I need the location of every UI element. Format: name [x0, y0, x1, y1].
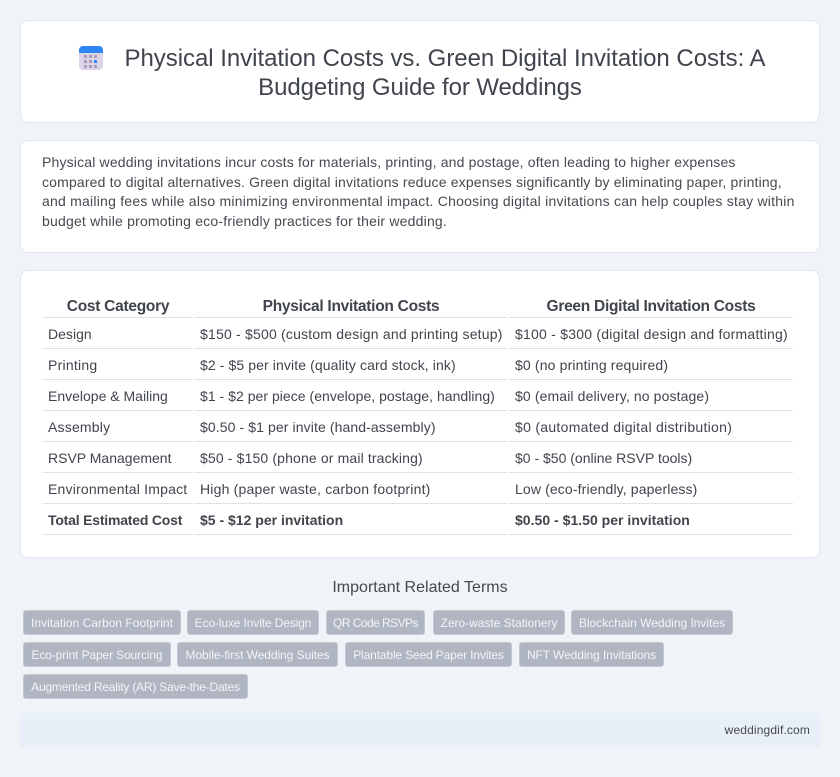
- text: $0 - $50 (online RSVP tools): [515, 450, 692, 466]
- icon: calendar: [79, 46, 103, 70]
- row: environmental impact: Environmental Impact: [48, 481, 187, 497]
- panel: introduction: [20, 140, 820, 253]
- text: $0 (automated digital distribution): [515, 419, 732, 435]
- row: assembly: Assembly: [48, 419, 110, 435]
- text: $5 - $12 per invitation: [200, 512, 343, 528]
- tags: related terms: Mobile-first Wedding Suites: [186, 648, 329, 662]
- row: envelope and mailing: Envelope & Mailing: [48, 388, 168, 404]
- title: Budgeting Guide for Weddings: [258, 74, 582, 101]
- text: $100 - $300 (digital design and formatting): [515, 326, 788, 342]
- text block: introduction: and mailing fees while also minimizing environmental impact. Choosing digital invitations can help couples stay within: [42, 193, 795, 209]
- tags: related terms: NFT Wedding Invitations: [527, 648, 656, 662]
- text block: introduction: [42, 154, 795, 229]
- panel: cost comparison table: [20, 270, 820, 558]
- text: $50 - $150 (phone or mail tracking): [200, 450, 423, 466]
- text: $0.50 - $1.50 per invitation: [515, 512, 690, 528]
- text: $0 (no printing required): [515, 357, 668, 373]
- tags: related terms: Blockchain Wedding Invites: [579, 616, 725, 630]
- text: High (paper waste, carbon footprint): [200, 481, 431, 497]
- table header: cost category: Cost Category: [67, 298, 169, 315]
- title: [124, 45, 766, 101]
- text block: introduction: Physical wedding invitations incur costs for materials, printing, and postage, often leading to higher expenses: [42, 154, 736, 170]
- panel: title header: [20, 20, 820, 123]
- tags: related terms: QR Code RSVPs: [333, 616, 418, 630]
- row: envelope and mailing: [48, 388, 709, 404]
- tags: related terms: Eco-luxe Invite Design: [195, 616, 311, 630]
- text block: introduction: compared to digital alternatives. Green digital invitations reduce expenses significantly by eliminating paper, printing,: [42, 174, 782, 190]
- tags: related terms: Plantable Seed Paper Invites: [353, 648, 504, 662]
- text: $0 (email delivery, no postage): [515, 388, 709, 404]
- row: RSVP management: [48, 450, 692, 466]
- row: design: Design: [48, 326, 92, 342]
- table header: green digital invitation costs: Green Digital Invitation Costs: [547, 298, 755, 315]
- footer: source: weddingdif.com: [725, 723, 810, 737]
- text: $0.50 - $1 per invite (hand-assembly): [200, 419, 436, 435]
- title: Physical Invitation Costs vs. Green Digital Invitation Costs: A: [124, 45, 766, 72]
- table header: physical invitation costs: Physical Invitation Costs: [263, 298, 439, 315]
- row: total estimated cost: [48, 512, 690, 528]
- tags: related terms: Zero-waste Stationery: [441, 616, 557, 630]
- row: RSVP management: RSVP Management: [48, 450, 171, 466]
- tags: related terms: Eco-print Paper Sourcing: [32, 648, 162, 662]
- text block: introduction: budget while promoting eco-friendly practices for their wedding.: [42, 213, 447, 229]
- text: $2 - $5 per invite (quality card stock, ink): [200, 357, 456, 373]
- row: total estimated cost: Total Estimated Cost: [48, 512, 182, 528]
- tags: related terms: Augmented Reality (AR) Save-the-Dates: [31, 680, 240, 694]
- table: cost comparison: [43, 317, 793, 535]
- tags: related terms: Invitation Carbon Footprint: [31, 616, 173, 630]
- row: assembly: [48, 419, 732, 435]
- text: $1 - $2 per piece (envelope, postage, handling): [200, 388, 495, 404]
- row: design: [48, 326, 788, 342]
- heading: important related terms: Important Related Terms: [332, 579, 508, 596]
- text: $150 - $500 (custom design and printing setup): [200, 326, 503, 342]
- row: printing: [48, 357, 668, 373]
- row: environmental impact: [48, 481, 697, 497]
- footer bar: [20, 713, 820, 747]
- row: printing: Printing: [48, 357, 97, 373]
- text: Low (eco-friendly, paperless): [515, 481, 697, 497]
